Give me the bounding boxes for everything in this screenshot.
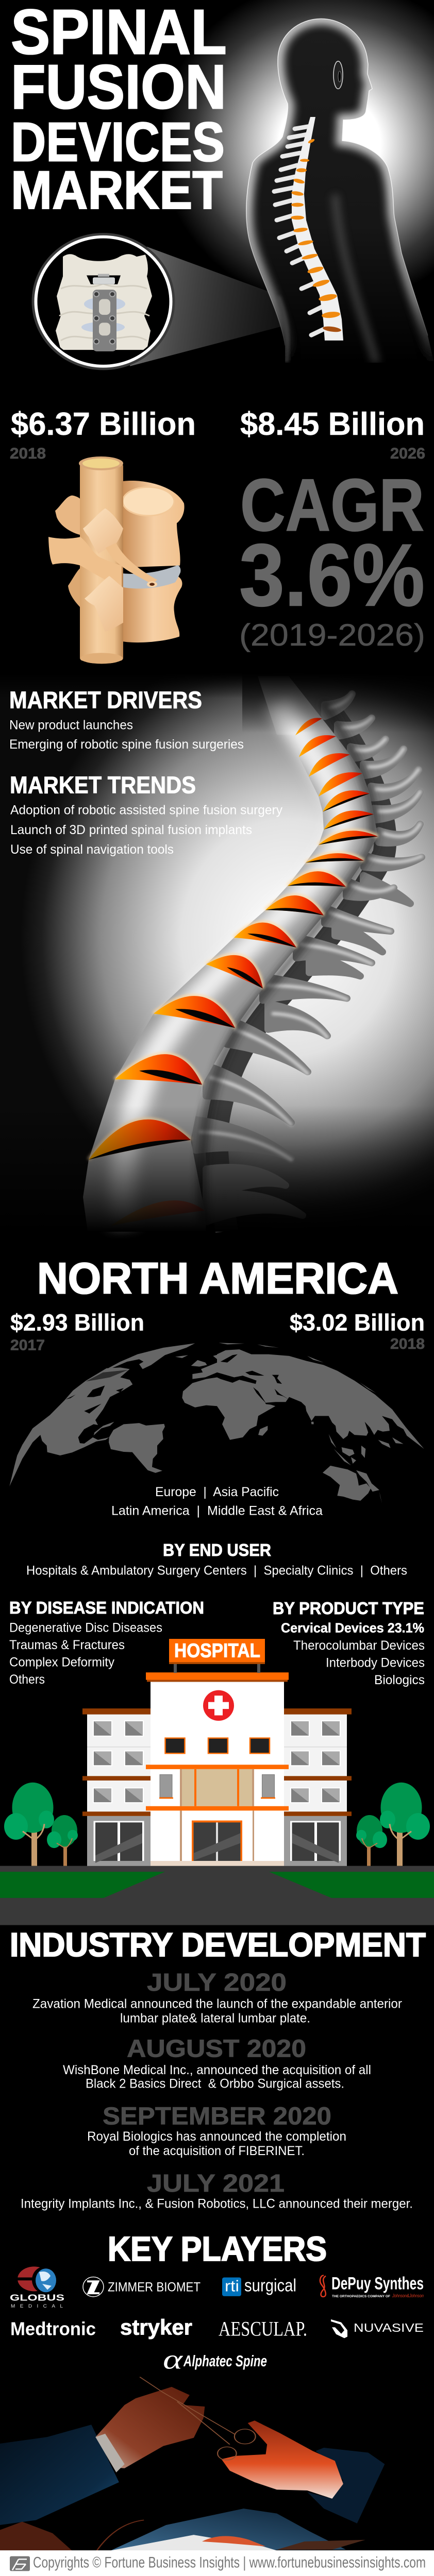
hospital building [0,1639,434,1925]
right wing [284,1708,352,1866]
title [11,0,227,221]
spinous and transverse processes [196,694,422,1222]
development: September 2020: Royal Biologics has announced the completion [87,2130,346,2144]
by product type: Therocolumbar Devices [293,1639,425,1653]
by disease indication: Traumas & Fractures [9,1638,125,1652]
market trends: Use of spinal navigation tools [10,843,174,857]
market trends [10,771,282,857]
development: July 2020: lumbar plate& lateral lumbar plate. [120,2011,310,2025]
development: July 2021: Integrity Implants Inc., & Fusion Robotics, LLC announced their merger. [21,2197,413,2211]
logo: Globus Medical [10,2266,64,2309]
development: August 2020 [63,2035,371,2091]
CAGR callout [239,464,425,653]
central tower [146,1672,289,1866]
market trends: Launch of 3D printed spinal fusion implants [10,823,252,837]
by product type: Cervical Devices 23.1% [281,1620,424,1635]
key players heading: KEY PLAYERS [108,2229,327,2268]
by product type: Biologics [374,1673,425,1687]
development: July 2020: Zavation Medical announced the launch of the expandable anterior [32,1997,402,2011]
left wing [82,1708,151,1866]
market drivers: New product launches [9,718,133,733]
logo: Alphatec Spine: α [163,2344,183,2375]
zoom cone from spine to circle [130,247,282,366]
by end user: Hospitals & Ambulatory Surgery Centers | Specialty Clinics | Others [26,1564,407,1578]
logo: DePuy Synthes [320,2274,424,2299]
illustration: vertebrae with spinal cord [48,456,185,664]
development: July 2020: JULY 2020 [147,1969,287,1996]
logos row one [10,2266,424,2309]
north america 2017 value [10,1309,144,1354]
logo: RTI Surgical: rti [225,2277,239,2295]
logo: Globus Medical: GLOBUS [10,2293,64,2302]
logo: Stryker: stryker [120,2315,192,2340]
trees left [4,1783,78,1866]
logos row two [10,2315,424,2375]
development: September 2020: SEPTEMBER 2020 [103,2103,331,2130]
other regions list [111,1485,323,1518]
logo: RTI Surgical [222,2276,296,2296]
market trends: MARKET TRENDS [10,771,196,798]
vertebral body column [83,676,378,1231]
logo: Globus Medical: MEDICAL [11,2303,63,2309]
development: July 2021 [21,2170,413,2211]
market drivers: MARKET DRIVERS [9,686,202,713]
by disease indication: Degenerative Disc Diseases [9,1621,162,1635]
development: August 2020: WishBone Medical Inc., announced the acquisition of all [63,2063,371,2077]
logo: Alphatec Spine: Alphatec Spine [183,2352,267,2370]
footer bar [0,2550,434,2576]
intervertebral discs [89,718,378,1226]
development: August 2020: AUGUST 2020 [127,2035,306,2062]
logo: RTI Surgical: surgical [244,2276,296,2295]
market value 2026: 2026 [390,445,425,462]
development: July 2021: JULY 2021 [147,2170,285,2197]
by disease indication: BY DISEASE INDICATION [9,1599,204,1618]
market drivers: Emerging of robotic spine fusion surgeries [9,738,244,752]
by end user [26,1541,407,1578]
hospital sign: HOSPITAL [174,1640,260,1662]
big spine illustration [0,673,434,1232]
by disease indication: Complex Deformity [9,1655,114,1670]
world map globe [9,1343,424,1503]
logo: Zimmer Biomet: ZIMMER BIOMET [108,2280,201,2294]
market value 2018 [10,406,196,462]
north america heading: NORTH AMERICA [37,1254,398,1303]
logo: Aesculap: AESCULAP. [219,2317,307,2340]
north america 2018 value: $3.02 Billion [290,1309,425,1335]
other regions list: Latin America | Middle East & Africa [111,1504,323,1518]
north america 2017 value: $2.93 Billion [10,1309,144,1335]
by disease indication [9,1599,204,1687]
logo: Medtronic: Medtronic [10,2318,96,2339]
market trends: Adoption of robotic assisted spine fusion surgery [10,803,282,817]
market value 2026: $8.45 Billion [240,406,425,442]
logo: NuVasive [331,2319,424,2338]
human silhouette [246,19,434,363]
hospital sign [169,1639,265,1673]
pedicle mass behind vertebral bodies [216,710,385,1231]
red cross emblem [203,1690,234,1721]
other regions list: Europe | Asia Pacific [155,1485,279,1499]
by disease indication: Others [9,1673,45,1687]
development: September 2020 [87,2103,346,2158]
logo: Zimmer Biomet [83,2277,201,2297]
by end user: BY END USER [163,1541,271,1560]
circular inset: cervical implant [32,233,175,370]
by product type [273,1599,425,1687]
footer logo [10,2556,30,2571]
road and lawn [0,1866,434,1925]
spine in figure [274,117,343,341]
north america 2017 value: 2017 [10,1337,45,1354]
hero illustration: human figure with spine [130,0,434,366]
CAGR callout: (2019-2026) [239,618,425,653]
market value 2018: 2018 [10,445,46,462]
title: MARKET [11,160,223,221]
market value 2018: $6.37 Billion [11,406,196,442]
logo: DePuy Synthes: THE ORTHOPAEDICS COMPANY OF [332,2295,390,2298]
development: July 2020 [32,1969,402,2025]
trees right [356,1783,430,1866]
north america 2018 value [290,1309,425,1352]
title: DEVICES [11,111,225,173]
development: August 2020: Black 2 Basics Direct & Orbbo Surgical assets. [86,2077,344,2091]
north america 2018 value: 2018 [390,1335,425,1352]
title: FUSION [11,52,226,122]
logo: NuVasive: NUVASIVE [354,2321,424,2334]
logo: Alphatec Spine [163,2344,267,2375]
logo: DePuy Synthes: Johnson&Johnson [392,2293,424,2299]
market value 2026 [240,406,425,462]
surgery photo [0,2377,385,2551]
market drivers [9,686,244,752]
by product type: Interbody Devices [326,1656,425,1670]
development: September 2020: of the acquisition of FIBERINET. [129,2144,305,2158]
